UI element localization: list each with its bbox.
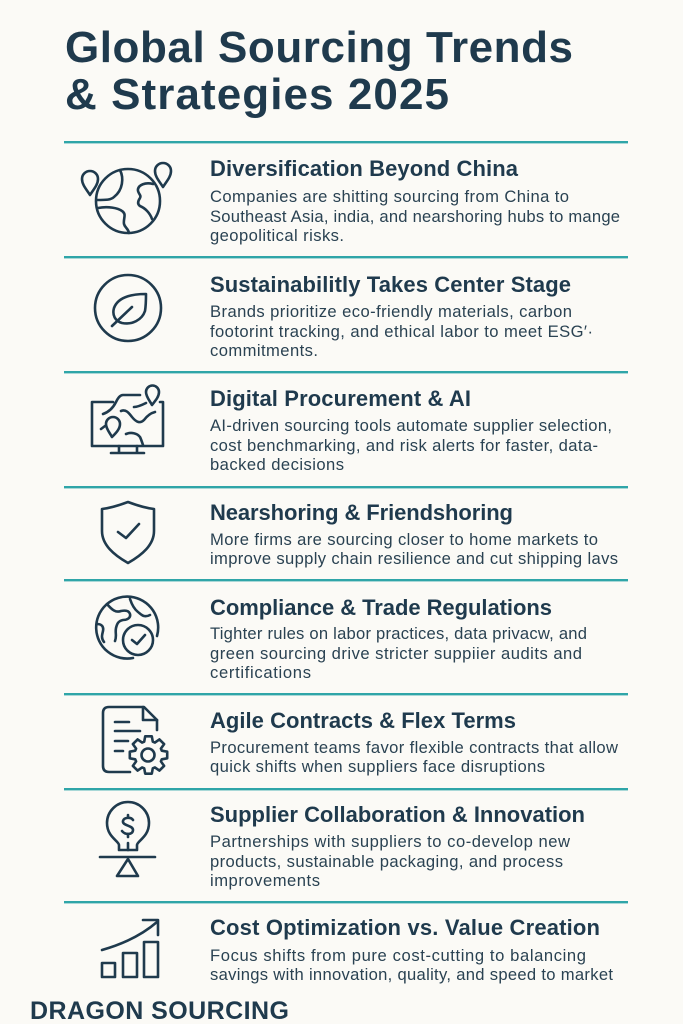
panel: compliance: green sourcing drive stricter suppiier audits and [210,644,582,663]
panel: nearshoring [102,500,618,568]
icon: globe with location pins [82,163,171,233]
title [65,23,573,119]
panel: compliance: Tighter rules on labor practices, data privacw, and [210,624,587,643]
panel: supplier collaboration: Supplier Collaboration & Innovation [210,802,585,827]
panel: sustainability: Sustainabilitly Takes Center Stage [210,272,571,297]
title: & Strategies 2025 [65,70,449,119]
icon: rising bar chart with arrow [102,920,158,977]
panel: digital procurement: backed decisions [210,455,344,474]
panel: sustainability: commitments. [210,341,318,360]
panel: agile contracts: quick shifts when suppliers face disruptions [210,757,545,776]
panel: nearshoring: improve supply chain resilience and cut shipping lavs [210,549,618,568]
panel: cost optimization [102,915,613,984]
icon: monitor with map [92,386,163,453]
icon: dollar lightbulb on balance [100,802,155,876]
panel: cost optimization: Cost Optimization vs. Value Creation [210,915,600,940]
panel: nearshoring: Nearshoring & Friendshoring [210,500,513,525]
panel: agile contracts: Agile Contracts & Flex Terms [210,708,516,733]
panel: digital procurement: AI-driven sourcing tools automate supplier selection, [210,416,612,435]
panel: diversification beyond china: Diversification Beyond China [210,156,519,181]
panel: agile contracts [103,707,619,776]
panel: compliance: certifications [210,663,311,682]
icon: document with gear [103,707,167,774]
panel: supplier collaboration: products, sustainable packaging, and process [210,852,563,871]
icon: shield with check [102,502,154,563]
panel: sustainability: footorint tracking, and ethical labor to meet ESG′· [210,322,593,341]
panel: diversification beyond china [82,156,620,245]
panel: supplier collaboration: Partnerships with suppliers to co-develop new [210,832,571,851]
panel: sustainability [95,272,593,360]
icon: globe with check badge [96,597,158,659]
panel: agile contracts: Procurement teams favor flexible contracts that allow [210,738,619,757]
panel: cost optimization: savings with innovation, quality, and speed to market [210,965,613,984]
panel: diversification beyond china: geopolitical risks. [210,226,344,245]
title: Global Sourcing Trends [65,23,573,72]
panel: digital procurement: Digital Procurement & AI [210,386,471,411]
panel: sustainability: Brands prioritize eco-friendly materials, carbon [210,302,572,321]
panel: nearshoring: More firms are sourcing closer to home markets to [210,530,598,549]
panel: digital procurement [92,386,612,474]
panel: compliance [96,595,587,682]
panel: supplier collaboration [100,802,585,890]
panel: digital procurement: cost benchmarking, and risk alerts for faster, data- [210,436,598,455]
panel: compliance: Compliance & Trade Regulations [210,595,552,620]
panel: diversification beyond china: Companies are shitting sourcing from China to [210,187,569,206]
panel: supplier collaboration: improvements [210,871,320,890]
icon: leaf in circle [95,275,161,341]
panel: cost optimization: Focus shifts from pure cost-cutting to balancing [210,946,586,965]
panel: diversification beyond china: Southeast Asia, india, and nearshoring hubs to mange [210,207,620,226]
